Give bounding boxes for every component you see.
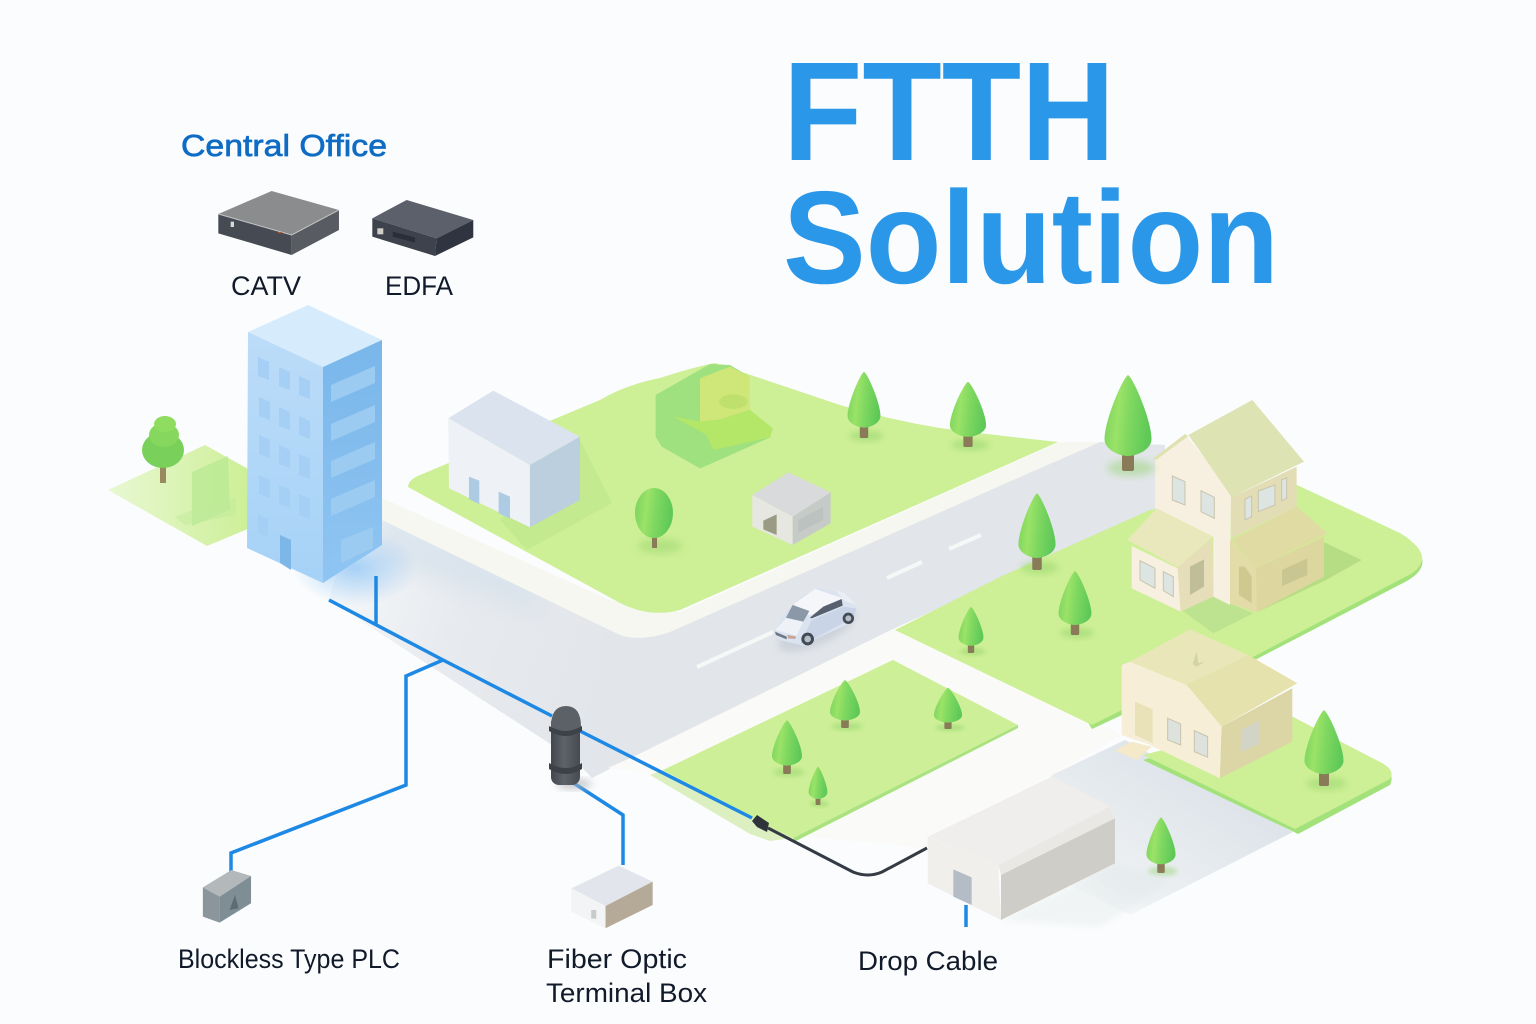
label: Drop Cable: Drop Cable (858, 946, 998, 976)
tree (848, 372, 883, 441)
label: Fiber Optic Terminal Box (546, 944, 708, 1008)
title (783, 32, 1279, 311)
heading: Central Office: Central Office (181, 128, 387, 163)
label: EDFA: EDFA (385, 271, 453, 301)
panel: lower lawn (650, 660, 1018, 842)
building: small grey hut (752, 472, 831, 545)
drop cable connector (752, 815, 927, 875)
tree: round (635, 488, 682, 553)
label: Fiber Optic Terminal Box: Fiber Optic (547, 944, 687, 974)
house: small bungalow (1115, 629, 1297, 778)
device: CATV (218, 191, 339, 255)
tree (830, 680, 862, 730)
title: FTTH (783, 32, 1115, 190)
building: green translucent block (656, 364, 773, 468)
glow below office building (293, 530, 417, 606)
tree (959, 607, 985, 655)
tree (1146, 817, 1178, 876)
panel: driveway (1000, 740, 1293, 915)
sidewalk: lower (608, 628, 1122, 848)
tree (1104, 375, 1155, 476)
tree (1018, 493, 1058, 574)
label: CATV: CATV (231, 271, 301, 301)
tree (1304, 710, 1346, 790)
tree (772, 720, 804, 777)
label: Blockless Type PLC: Blockless Type PLC (178, 944, 400, 974)
tree (934, 688, 964, 731)
sidewalk: upper (382, 442, 1100, 638)
fiber cable network (231, 576, 966, 927)
building: white warehouse (448, 391, 580, 527)
panel: upper lawn (408, 363, 1058, 613)
panel: left lawn (108, 445, 250, 546)
tree (950, 382, 989, 450)
car (772, 588, 861, 661)
device: PLC box (203, 870, 251, 923)
tree (1059, 571, 1094, 638)
road (329, 442, 1165, 778)
building: garage (928, 777, 1173, 927)
fiber closure pole (549, 706, 592, 789)
device: terminal box (571, 866, 653, 928)
panel: right lawn (895, 485, 1423, 729)
device: EDFA (372, 200, 473, 256)
panel: lower right lawn (1143, 717, 1392, 834)
label: Fiber Optic Terminal Box: Terminal Box (546, 978, 708, 1008)
tree (809, 767, 829, 807)
title: Solution (783, 164, 1279, 311)
tree: left layered (142, 416, 184, 483)
building: central office (247, 305, 382, 583)
house: large two-storey (1127, 400, 1362, 633)
